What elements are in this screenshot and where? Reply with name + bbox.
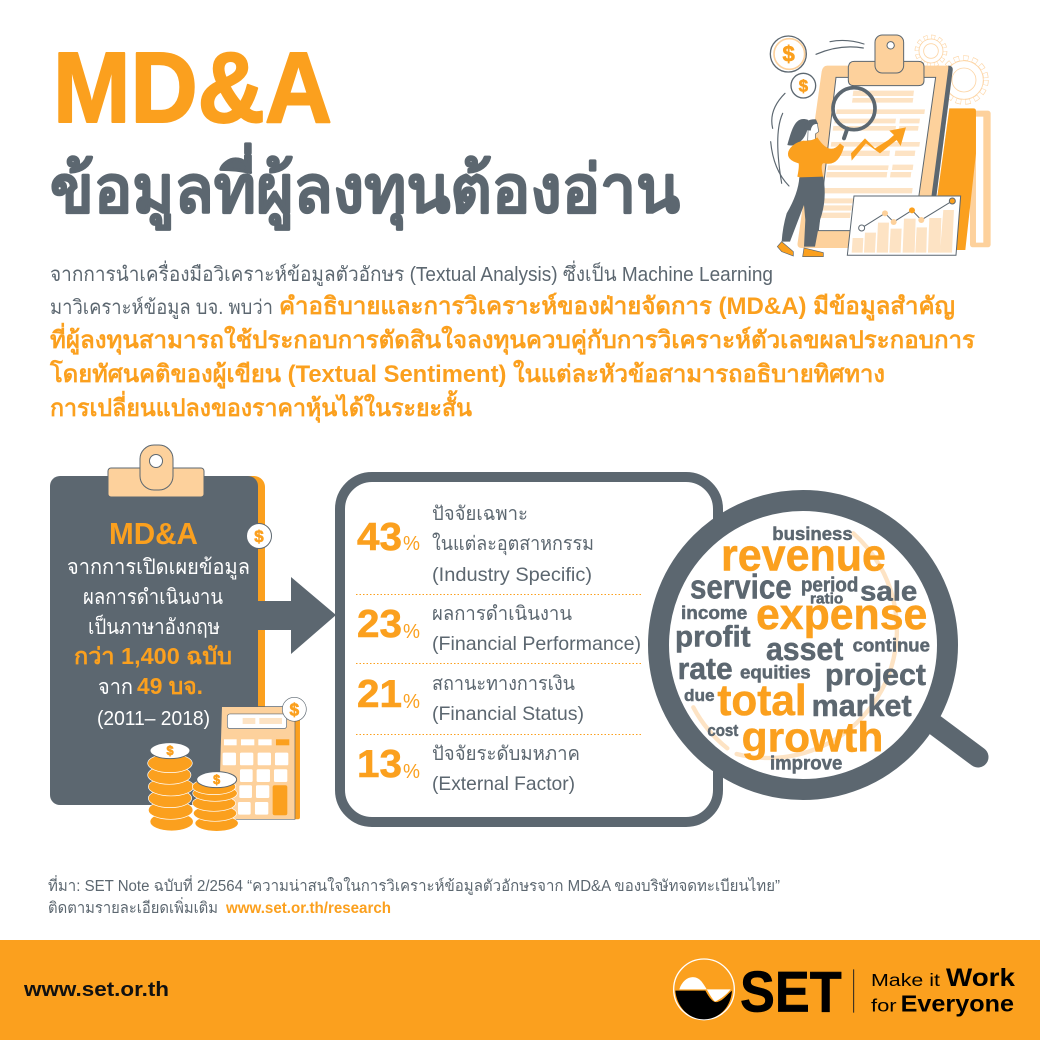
factor: financial status 21% (357, 673, 584, 725)
word cloud: expense (756, 591, 927, 639)
intro paragraph: การเปลี่ยนแปลงของราคาหุ้นได้ในระยะสั้น (50, 389, 473, 424)
word cloud: improve (770, 753, 843, 774)
word cloud: growth (742, 714, 883, 761)
subtitle: Thai heading: ข้อมูลที่ผู้ลงทุนต้องอ่าน (50, 142, 680, 231)
word cloud: asset (766, 630, 843, 667)
word cloud (675, 523, 930, 774)
clipboard text: ผลการดำเนินงาน (83, 586, 223, 609)
factor: financial status 21%: (Financial Status) (432, 703, 584, 725)
intro paragraph (49, 260, 975, 424)
word cloud: project (825, 658, 926, 692)
factor: industry specific 43%: 43 (357, 516, 402, 559)
factor: financial status 21%: 21 (357, 673, 402, 716)
factor: industry specific 43%: ปัจจัยเฉพาะ (432, 503, 528, 525)
word cloud: period (801, 575, 858, 597)
word cloud: business (772, 523, 853, 544)
word cloud: due (684, 686, 715, 705)
icon: calculator: $ (289, 700, 299, 720)
factor: industry specific 43%: ในแต่ละอุตสาหกรรม (432, 532, 594, 556)
factor: external factor 13%: 13 (357, 743, 402, 786)
word cloud: service (690, 568, 792, 606)
word cloud: continue (853, 635, 930, 656)
factor: financial status 21%: % (403, 691, 420, 713)
icon: calculator (218, 697, 306, 819)
illustration: analyst with clipboard: $ (799, 77, 809, 96)
word cloud: income (681, 602, 747, 623)
SET logo and slogan: SET (740, 960, 842, 1024)
icon: dollar badge: $ (254, 527, 264, 546)
factor: financial performance 23%: 23 (357, 603, 402, 646)
source note (48, 875, 780, 917)
source note: ที่มา: SET Note ฉบับที่ 2/2564 “ความน่าสนใจในการวิเคราะห์ข้อมูลตัวอักษรจาก MD&A ของบริษัทจดทะเบียนไทย” (48, 875, 780, 896)
factor: external factor 13%: (External Factor) (432, 773, 575, 795)
title: MD&A: MD&A (53, 32, 332, 144)
clipboard text: MD&A (109, 516, 198, 551)
footer url: www.set.or.th (23, 979, 169, 1001)
intro paragraph: โดยทัศนคติของผู้เขียน (Textual Sentiment) ในแต่ละหัวข้อสามารถอธิบายทิศทาง (49, 359, 885, 389)
factor: external factor 13%: % (403, 761, 420, 783)
clipboard text (67, 516, 250, 730)
panel: factor breakdown (340, 477, 718, 822)
factor: financial performance 23% (357, 603, 641, 655)
SET logo and slogan: Make it (871, 970, 940, 990)
word cloud: equities (740, 661, 811, 682)
clipboard text: เป็นภาษาอังกฤษ (88, 613, 220, 639)
factor: financial performance 23%: % (403, 621, 420, 643)
clipboard text: 49 บจ. (137, 673, 203, 699)
clipboard text: จากการเปิดเผยข้อมูล (67, 556, 250, 580)
word cloud: market (812, 689, 912, 723)
icon: coin stacks: $ (166, 744, 174, 758)
illustration: analyst with clipboard (770, 35, 991, 257)
factor: industry specific 43%: (Industry Specific) (432, 564, 592, 586)
factor: financial performance 23%: ผลการดำเนินงาน (432, 603, 572, 625)
word cloud: sale (860, 576, 917, 607)
intro paragraph: ที่ผู้ลงทุนสามารถใช้ประกอบการตัดสินใจลงทุนควบคู่กับการวิเคราะห์ตัวเลขผลประกอบการ (50, 322, 975, 356)
word cloud: ratio (810, 590, 843, 607)
clipboard text: จาก (98, 676, 133, 699)
intro paragraph: คำอธิบายและการวิเคราะห์ของฝ่ายจัดการ (MD&A) มีข้อมูลสำคัญ (279, 292, 955, 321)
factor: external factor 13%: ปัจจัยระดับมหภาค (432, 743, 580, 765)
word cloud: revenue (721, 530, 886, 581)
SET logo and slogan: for (871, 995, 897, 1015)
source note: ติดตามรายละเอียดเพิ่มเติม (48, 897, 218, 917)
intro paragraph: มาวิเคราะห์ข้อมูล บจ. พบว่า (50, 296, 273, 320)
icon: coin stacks: $ (213, 773, 220, 787)
icon: dollar badge (246, 524, 272, 548)
clipboard text: (2011– 2018) (97, 708, 210, 730)
SET logo and slogan (674, 959, 1016, 1024)
illustration: analyst with clipboard: $ (783, 42, 795, 67)
intro paragraph: จากการนำเครื่องมือวิเคราะห์ข้อมูลตัวอักษร (Textual Analysis) ซึ่งเป็น Machine Learning (50, 260, 773, 287)
factor: industry specific 43% (357, 503, 594, 586)
footer band (0, 940, 1040, 1040)
word cloud: rate (678, 652, 733, 686)
magnifier with word cloud (658, 500, 978, 790)
factor: financial status 21%: สถานะทางการเงิน (432, 673, 575, 695)
factor: industry specific 43%: % (403, 533, 420, 555)
word cloud: total (717, 677, 807, 725)
icon: clipboard clip (108, 445, 204, 497)
arrow: clipboard to factors (258, 577, 336, 654)
factor: financial performance 23%: (Financial Performance) (432, 633, 641, 655)
source note: www.set.or.th/research (225, 900, 391, 917)
factor: external factor 13% (357, 743, 580, 795)
word cloud: profit (675, 621, 751, 654)
SET logo and slogan: Everyone (901, 990, 1014, 1016)
SET logo and slogan: Work (946, 964, 1016, 992)
clipboard text: กว่า 1,400 ฉบับ (74, 643, 232, 669)
word cloud: cost (707, 721, 739, 740)
panel: clipboard MD&A summary (50, 445, 272, 806)
icon: coin stacks (148, 743, 238, 831)
